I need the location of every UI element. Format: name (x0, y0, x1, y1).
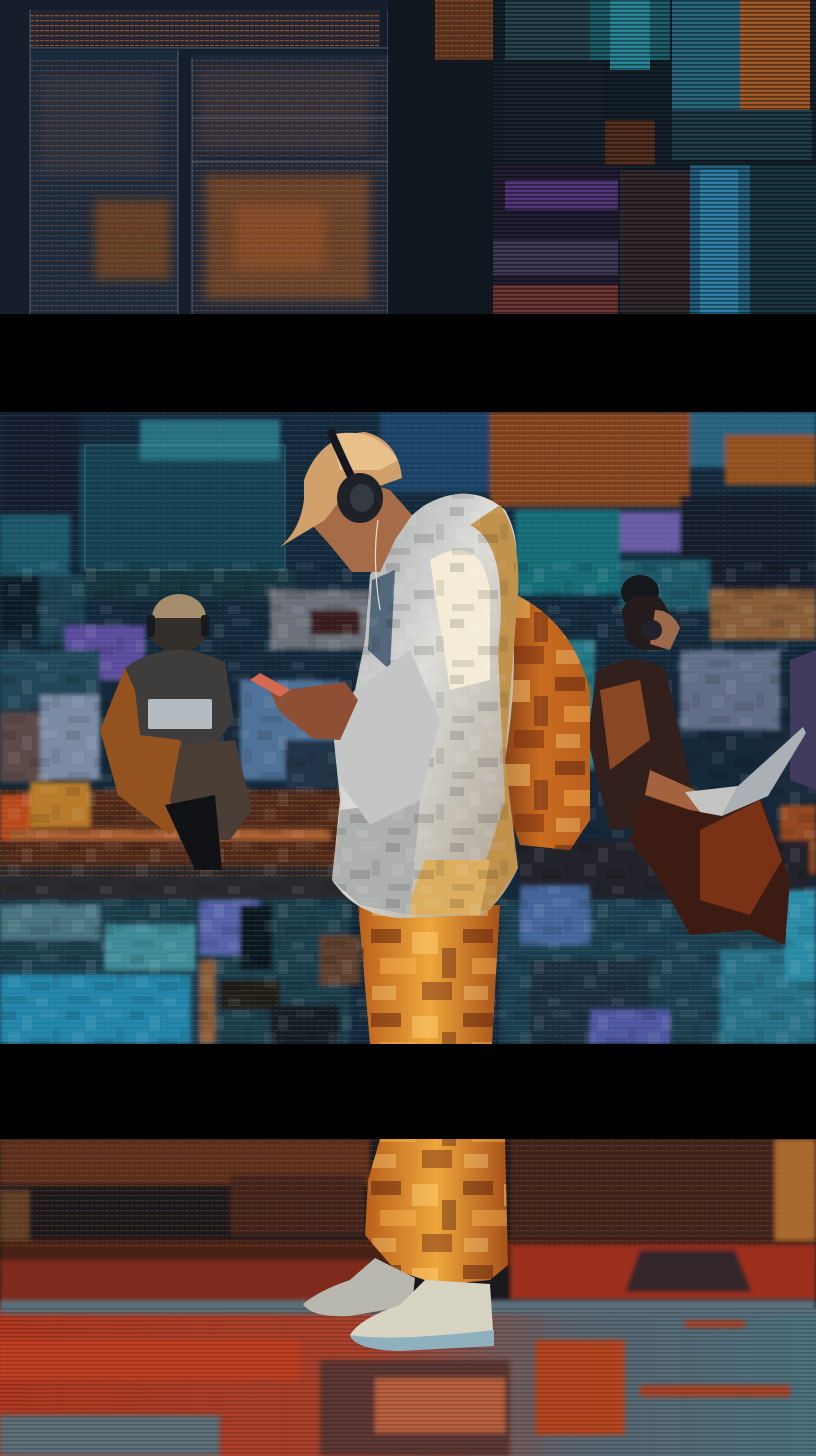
figure: right seated person (588, 575, 816, 945)
hand and phone (270, 682, 358, 740)
headphones (330, 430, 383, 523)
sleeve (332, 650, 440, 825)
panel: floor and shoes (0, 1139, 816, 1456)
red band (0, 1245, 816, 1306)
head (312, 484, 412, 572)
background mosaic (0, 412, 816, 800)
cap (280, 432, 402, 547)
lower mosaic (0, 560, 816, 1044)
dark central column (388, 0, 493, 314)
panel: main scene (0, 412, 816, 1044)
trousers (358, 905, 500, 1044)
panel: top data wall (0, 0, 816, 314)
jacket (332, 494, 518, 918)
upper data wall (0, 1139, 816, 1265)
laptop (685, 727, 806, 816)
backpack (505, 596, 590, 850)
figure: standing person (250, 430, 590, 1044)
shoes (303, 1258, 494, 1351)
floor reflection (0, 1300, 816, 1456)
left data grid (30, 10, 388, 314)
trouser legs (365, 1139, 508, 1285)
right colour blocks (493, 0, 816, 314)
figure: left seated person (100, 594, 252, 870)
orange ledge band (0, 782, 816, 900)
